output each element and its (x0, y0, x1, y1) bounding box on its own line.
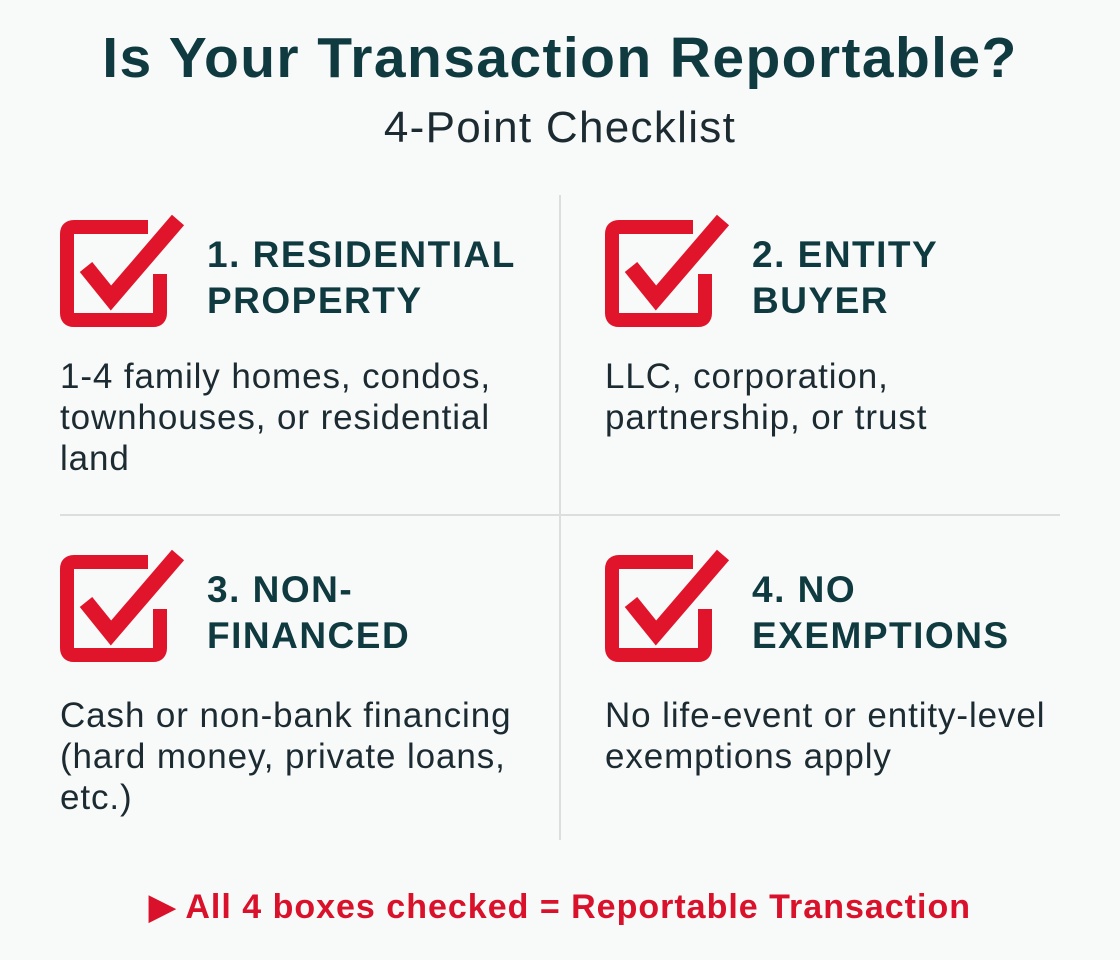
panel: no exemptions (605, 550, 1045, 776)
heading: 1. RESIDENTIAL (207, 234, 516, 275)
panel: non-financed (60, 550, 511, 817)
text: LLC, corporation, (605, 357, 889, 396)
text: (hard money, private loans, (60, 737, 506, 776)
heading: 2. ENTITY (752, 234, 938, 275)
heading: 4. NO (752, 569, 856, 610)
footer callout: ▶ All 4 boxes checked = Reportable Transaction (149, 888, 971, 926)
icon: checkbox (60, 550, 184, 662)
text (60, 696, 511, 817)
text: Cash or non-bank financing (60, 696, 511, 735)
text: partnership, or trust (605, 398, 927, 437)
panel: residential property (60, 214, 516, 478)
text: land (60, 439, 130, 478)
text: exemptions apply (605, 737, 892, 776)
text (605, 357, 927, 437)
icon: checkbox (60, 214, 184, 327)
heading: BUYER (752, 280, 889, 321)
text: townhouses, or residential (60, 398, 490, 437)
text: No life-event or entity-level (605, 696, 1045, 735)
title: Is Your Transaction Reportable? (102, 26, 1018, 90)
heading: FINANCED (207, 615, 410, 656)
panel: entity buyer (605, 214, 938, 437)
heading (752, 234, 938, 321)
text: 1-4 family homes, condos, (60, 357, 491, 396)
heading: PROPERTY (207, 280, 423, 321)
text (60, 357, 491, 478)
heading: 3. NON- (207, 569, 353, 610)
subtitle: 4-Point Checklist (384, 103, 736, 152)
icon: checkbox (605, 214, 729, 327)
heading (752, 569, 1010, 656)
heading: EXEMPTIONS (752, 615, 1010, 656)
icon: checkbox (605, 550, 729, 662)
heading (207, 234, 516, 321)
text: etc.) (60, 778, 133, 817)
heading (207, 569, 410, 656)
text (605, 696, 1045, 776)
